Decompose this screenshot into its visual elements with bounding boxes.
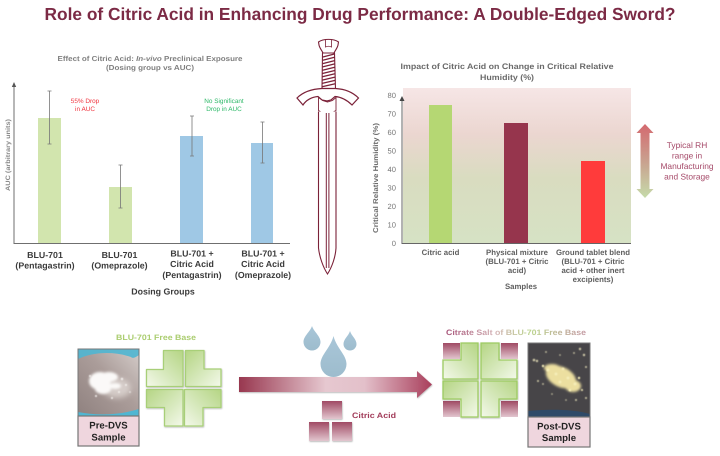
double arrow: RH range (636, 124, 654, 198)
chart title: CRH (400, 62, 614, 82)
category labels: AUC: (Omeprazole) (91, 260, 148, 270)
y axis ticks: CRH (388, 91, 396, 248)
y axis ticks: CRH: 60 (388, 128, 396, 137)
panel: critical relative humidity chart (372, 62, 714, 291)
y axis ticks: CRH: 50 (388, 146, 396, 156)
y axis ticks: CRH: 40 (388, 165, 396, 174)
icon: free base cross (146, 350, 221, 426)
label: typical RH range: and Storage (664, 172, 710, 182)
chart title: CRH: Humidity (%) (480, 73, 534, 82)
chart title: AUC (58, 54, 242, 72)
photo: pre-DVS powder (78, 349, 139, 416)
icon: sword (297, 39, 358, 274)
callout: no significant drop: Drop in AUC (206, 106, 242, 113)
category labels: AUC: BLU-701 + (170, 248, 214, 258)
panel: AUC bar chart (5, 54, 291, 296)
category labels: CRH: (BLU-701 + Citric (485, 257, 549, 266)
label: Pre-DVS sample: Sample (91, 432, 126, 444)
chart title: AUC: Effect of Citric Acid: In-vivo Preclinical Exposure (58, 54, 242, 63)
y axis label: CRH: Critical Relative Humidity (%) (372, 123, 380, 233)
icon: citric acid cubes (309, 401, 352, 441)
category labels: AUC: (Omeprazole) (235, 270, 291, 280)
y axis ticks: CRH: 10 (388, 220, 396, 230)
label: typical RH range: Manufacturing (660, 161, 714, 171)
axes: AUC (12, 82, 290, 244)
category labels: CRH: acid) (508, 266, 526, 275)
callout: no significant drop: No Significant (204, 98, 244, 105)
label: typical RH range (660, 140, 714, 182)
category labels: AUC: BLU-701 + (241, 248, 285, 258)
callout: no significant drop (204, 98, 244, 113)
label: Pre-DVS sample (78, 416, 139, 446)
category labels: AUC: BLU-701 (102, 250, 137, 260)
panel: citrate salt (443, 328, 590, 447)
chart title: AUC: (Dosing group vs AUC) (106, 63, 195, 72)
callout: 55% drop: in AUC (75, 106, 95, 113)
category labels: CRH: Citric acid (422, 248, 460, 257)
x axis label: AUC: Dosing Groups (131, 286, 195, 296)
y axis ticks: CRH: 30 (388, 184, 396, 192)
title: Role of Citric Acid in Enhancing Drug Performance: A Double-Edged Sword? (44, 4, 676, 24)
label: Post-DVS sample (528, 417, 590, 447)
arrow: reaction (239, 371, 432, 398)
category labels: AUC: (Pentagastrin) (162, 270, 222, 280)
label: Post-DVS sample: Sample (542, 433, 576, 444)
label: citric acid: Citric Acid (352, 411, 396, 420)
icon: citrate salt cross with cubes (443, 343, 518, 417)
y axis ticks: CRH: 80 (388, 91, 396, 100)
category labels: CRH: Ground tablet blend (556, 248, 630, 257)
callout: 55% drop (71, 98, 100, 113)
y axis ticks: CRH: 20 (388, 202, 396, 211)
label: Post-DVS sample: Post-DVS (537, 422, 581, 432)
category labels: CRH (422, 248, 630, 284)
category labels: AUC: BLU-701 (27, 250, 63, 260)
callout: 55% drop: 55% Drop (71, 98, 100, 105)
heading: BLU-701 Free Base: BLU-701 Free Base (116, 333, 197, 342)
y axis ticks: CRH: 70 (388, 110, 396, 118)
label: typical RH range: range in (672, 150, 702, 160)
heading: citrate salt: Citrate Salt of BLU-701 Free Base (446, 328, 587, 337)
category labels: AUC: (Pentagastrin) (15, 260, 75, 270)
category labels: AUC: Citric Acid (241, 259, 285, 269)
y axis ticks: CRH: 0 (392, 239, 396, 248)
label: typical RH range: Typical RH (667, 140, 707, 150)
icon: water drops (304, 326, 356, 377)
label: Pre-DVS sample: Pre-DVS (89, 420, 128, 432)
background band: RH range (403, 88, 631, 243)
bars: AUC (38, 118, 273, 243)
y axis label: AUC: AUC (arbitrary units) (5, 119, 12, 191)
panel: free base (78, 333, 221, 446)
x axis label: CRH: Samples (505, 282, 538, 291)
category labels: CRH: Physical mixture (486, 248, 549, 257)
error bars: AUC (48, 91, 264, 208)
category labels: AUC (15, 248, 291, 280)
bars: CRH (429, 105, 605, 243)
category labels: AUC: Citric Acid (170, 259, 214, 269)
category labels: CRH: acid + other inert (561, 266, 625, 275)
category labels: CRH: excipients) (573, 275, 614, 284)
chart title: CRH: Impact of Citric Acid on Change in Critical Relative (400, 62, 614, 71)
category labels: CRH: (BLU-701 + Citric (561, 257, 625, 266)
photo: post-DVS granules (528, 343, 590, 417)
axes: CRH (400, 96, 631, 244)
